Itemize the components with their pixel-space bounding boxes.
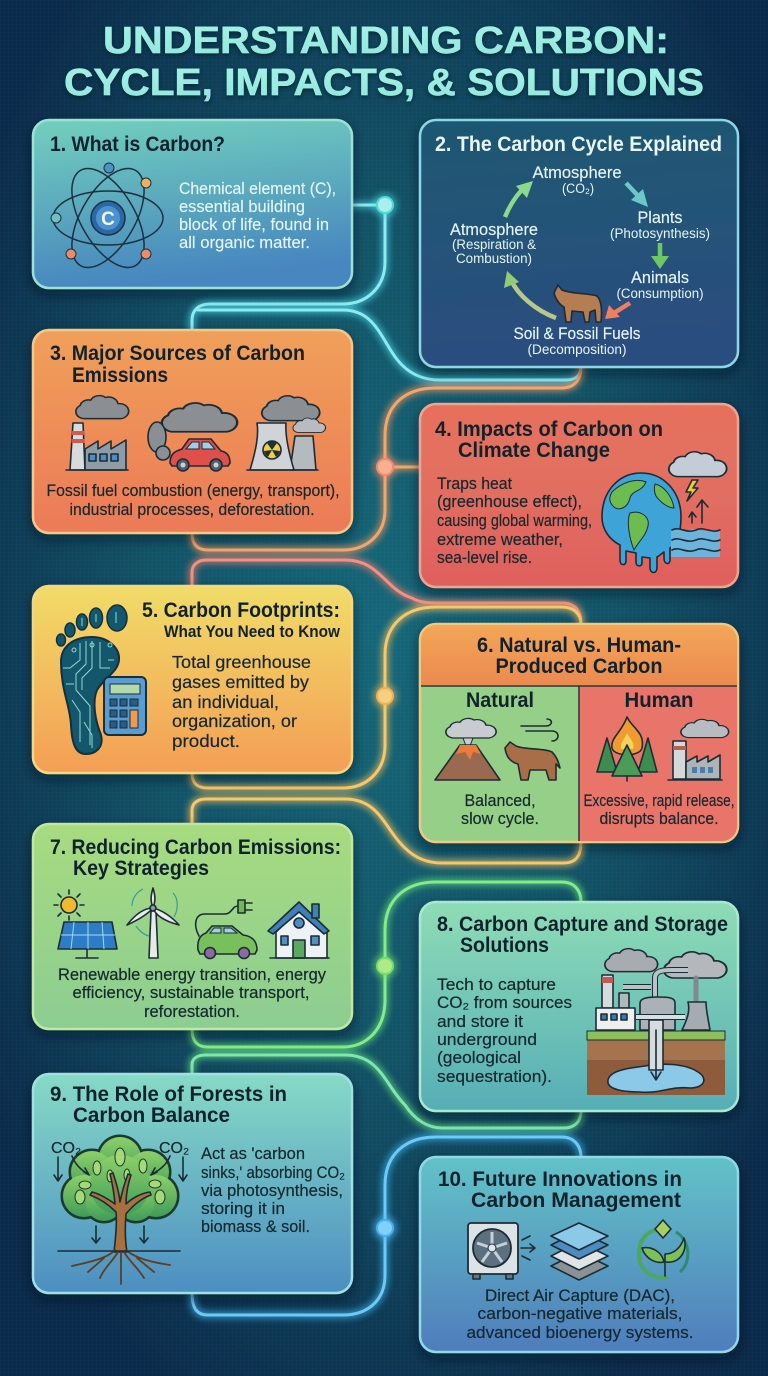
icon: material layers bbox=[551, 1223, 608, 1280]
text 3 bbox=[46, 482, 340, 519]
text 8: CO₂ from sources bbox=[437, 994, 572, 1012]
node: panel 7 bbox=[373, 954, 397, 978]
panel 3: emissions sources bbox=[33, 330, 352, 533]
heading 10 bbox=[438, 1167, 682, 1212]
text 4: extreme weather, bbox=[437, 531, 563, 549]
title: CYCLE, IMPACTS, & SOLUTIONS bbox=[64, 62, 704, 104]
icon: tree with co2 arrows: CO₂ bbox=[159, 1140, 189, 1157]
text 1: all organic matter. bbox=[179, 234, 310, 252]
text 3: Fossil fuel combustion (energy, transport), bbox=[46, 482, 340, 500]
icon: storm cloud bbox=[669, 452, 727, 501]
icon: recycling plant bbox=[639, 1220, 688, 1278]
panel 9: forests bbox=[33, 1074, 352, 1293]
icon: house bbox=[268, 902, 329, 958]
panel 6: natural vs human bbox=[420, 624, 738, 842]
icon: capture plant and storage bbox=[587, 949, 727, 1095]
panel 5: carbon footprints bbox=[33, 586, 352, 773]
cycle labels: (Respiration & bbox=[452, 237, 536, 252]
human text: disrupts balance. bbox=[600, 810, 718, 828]
text 4: Traps heat bbox=[437, 475, 512, 493]
cycle labels: (Decomposition) bbox=[528, 342, 626, 357]
heading 7: 7. Reducing Carbon Emissions: bbox=[50, 835, 341, 859]
icon: factory bbox=[66, 396, 129, 470]
icon: atom: C bbox=[101, 209, 115, 230]
natural text bbox=[461, 792, 539, 828]
text 9: storing it in bbox=[201, 1200, 285, 1218]
cycle labels: (Photosynthesis) bbox=[610, 226, 710, 241]
cycle labels: Atmosphere bbox=[532, 164, 622, 182]
text 8: underground bbox=[437, 1031, 537, 1049]
heading 8 bbox=[437, 912, 728, 957]
heading 6 bbox=[477, 633, 681, 678]
icon: burning trees bbox=[597, 717, 657, 781]
text 1: Chemical element (C), bbox=[179, 180, 336, 198]
text 5 bbox=[172, 652, 311, 751]
heading 4: Climate Change bbox=[458, 438, 610, 462]
text 9: biomass & soil. bbox=[201, 1218, 310, 1236]
text 9: Act as 'carbon bbox=[201, 1145, 305, 1163]
panel 8: capture and storage bbox=[420, 902, 738, 1111]
connectors: glowing path linking all panels bbox=[192, 205, 581, 1315]
cycle arrows bbox=[504, 181, 669, 319]
icon: car with smoke bbox=[148, 403, 237, 471]
cycle labels: (CO₂) bbox=[562, 181, 594, 196]
human subheading: Human bbox=[624, 688, 694, 712]
icon: direct air capture unit bbox=[468, 1223, 535, 1279]
text 7: efficiency, sustainable transport, bbox=[72, 984, 310, 1002]
natural text: Balanced, bbox=[464, 792, 536, 810]
heading 3: 3. Major Sources of Carbon bbox=[50, 341, 305, 365]
text 8: and store it bbox=[437, 1013, 523, 1031]
heading 5: 5. Carbon Footprints: bbox=[142, 598, 340, 622]
panel 7: reducing emissions bbox=[33, 824, 352, 1029]
text 7: reforestation. bbox=[144, 1003, 240, 1021]
text 3: industrial processes, deforestation. bbox=[70, 501, 314, 519]
heading 10: Carbon Management bbox=[471, 1188, 681, 1212]
node: panel 1 bbox=[373, 193, 397, 217]
text 9: sinks,' absorbing CO₂ bbox=[201, 1164, 345, 1182]
icon: calculator bbox=[104, 677, 146, 735]
cycle labels: Combustion) bbox=[456, 251, 532, 266]
heading 1: 1. What is Carbon? bbox=[50, 132, 225, 156]
icon: sun and solar panel bbox=[54, 890, 117, 958]
heading 4 bbox=[435, 417, 663, 462]
icon: animal and wind bbox=[505, 719, 560, 780]
heading 3 bbox=[50, 341, 305, 387]
icon: cooling towers bbox=[247, 396, 326, 470]
text 5: organization, or bbox=[172, 711, 297, 731]
heading 8: 8. Carbon Capture and Storage bbox=[437, 912, 728, 936]
heading 6: 6. Natural vs. Human- bbox=[477, 633, 681, 657]
icon: cow bbox=[554, 285, 602, 322]
icon: melting globe bbox=[602, 473, 681, 572]
title: UNDERSTANDING CARBON: bbox=[103, 20, 669, 62]
heading 8: Solutions bbox=[460, 933, 549, 957]
icon: electric car bbox=[196, 900, 257, 958]
icon: small factory bbox=[668, 719, 729, 780]
cycle labels: Animals bbox=[631, 269, 689, 287]
panel 2: carbon cycle bbox=[420, 120, 738, 367]
cycle labels: (Consumption) bbox=[616, 286, 704, 301]
panel 10: future innovations bbox=[420, 1157, 738, 1352]
text 1: block of life, found in bbox=[179, 216, 329, 234]
cycle labels: Atmosphere bbox=[450, 221, 538, 239]
icon: volcano bbox=[435, 718, 500, 780]
human text bbox=[584, 792, 734, 828]
human text: Excessive, rapid release, bbox=[584, 792, 734, 810]
text 5: Total greenhouse bbox=[172, 652, 311, 672]
cycle labels: Soil & Fossil Fuels bbox=[514, 325, 640, 343]
node: panel 4 bbox=[373, 455, 397, 479]
text 1: essential building bbox=[179, 198, 305, 216]
text 5: product. bbox=[172, 731, 240, 751]
icon: atom bbox=[51, 157, 163, 279]
text 10: Direct Air Capture (DAC), bbox=[485, 1287, 675, 1305]
panel 4: climate impacts bbox=[420, 404, 738, 587]
text 8: (geological bbox=[437, 1049, 521, 1067]
text 10: advanced bioenergy systems. bbox=[466, 1324, 694, 1342]
heading 5 bbox=[142, 598, 341, 641]
natural subheading: Natural bbox=[466, 688, 534, 712]
heading 9: 9. The Role of Forests in bbox=[50, 1082, 287, 1106]
text 8: Tech to capture bbox=[437, 976, 556, 994]
cycle labels: Plants bbox=[638, 209, 682, 227]
text 10 bbox=[466, 1287, 694, 1342]
natural text: slow cycle. bbox=[461, 810, 539, 828]
text 9 bbox=[201, 1145, 345, 1236]
text 4 bbox=[437, 475, 592, 567]
cycle labels bbox=[450, 164, 710, 357]
text 8 bbox=[437, 976, 572, 1086]
icon: tree with co2 arrows: CO₂ bbox=[51, 1140, 81, 1157]
heading 7: Key Strategies bbox=[73, 856, 209, 880]
text 7: Renewable energy transition, energy bbox=[58, 966, 327, 984]
text 8: sequestration). bbox=[437, 1068, 552, 1086]
heading 4: 4. Impacts of Carbon on bbox=[435, 417, 663, 441]
text 5: gases emitted by bbox=[172, 672, 309, 692]
text 10: carbon-negative materials, bbox=[478, 1305, 682, 1323]
heading 6: Produced Carbon bbox=[496, 654, 662, 678]
icon: circuit footprint bbox=[56, 605, 127, 754]
heading 9: Carbon Balance bbox=[73, 1103, 230, 1127]
icon: tree with co2 arrows bbox=[51, 1136, 189, 1284]
text 9: via photosynthesis, bbox=[201, 1182, 343, 1200]
icon: wind turbine bbox=[127, 888, 179, 958]
text 4: causing global warming, bbox=[437, 512, 592, 530]
heading 10: 10. Future Innovations in bbox=[438, 1167, 682, 1191]
title bbox=[64, 20, 704, 104]
heading 9 bbox=[50, 1082, 287, 1127]
text 4: sea-level rise. bbox=[437, 549, 532, 567]
text 1 bbox=[179, 180, 336, 252]
text 5: an individual, bbox=[172, 692, 279, 712]
node: panel 6 bbox=[373, 684, 397, 708]
heading 2: 2. The Carbon Cycle Explained bbox=[435, 132, 722, 156]
heading 3: Emissions bbox=[72, 363, 168, 387]
node: panel 10 bbox=[373, 1216, 397, 1240]
text 7 bbox=[58, 966, 327, 1021]
icon: rising seas bbox=[671, 500, 720, 557]
heading 5: What You Need to Know bbox=[164, 622, 341, 641]
panel 1: what is carbon bbox=[33, 120, 352, 288]
heading 7 bbox=[50, 835, 341, 880]
text 4: (greenhouse effect), bbox=[437, 493, 582, 511]
